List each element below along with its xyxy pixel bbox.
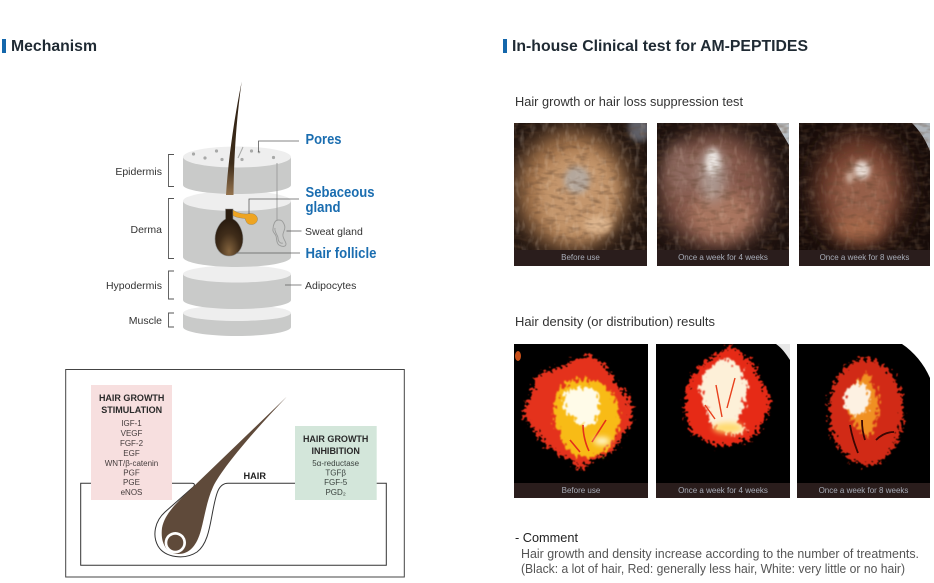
callout labels: Sebaceous	[306, 185, 374, 201]
layer labels: Epidermis	[115, 166, 162, 178]
comment block: - Comment	[515, 531, 579, 545]
box: inhibition: PGD₂	[325, 488, 346, 497]
caption: Before use	[562, 486, 601, 495]
callout labels: Hair follicle	[306, 246, 376, 262]
callout labels: Pores	[306, 132, 342, 148]
hair and follicle	[162, 397, 287, 554]
skin layer: hypodermis	[183, 266, 291, 309]
box: inhibition: FGF-5	[324, 478, 348, 487]
box: stimulation: STIMULATION	[101, 405, 162, 415]
heading: In-house Clinical test: In-house Clinical test for AM-PEPTIDES	[512, 38, 808, 55]
box: stimulation: PGF	[123, 468, 140, 478]
box: inhibition: 5α-reductase	[312, 459, 360, 468]
density map: before use	[514, 344, 648, 498]
photo: before use	[514, 114, 652, 266]
box: inhibition: HAIR GROWTH	[303, 434, 368, 444]
photo: 4 weeks	[657, 123, 789, 266]
box: stimulation: HAIR GROWTH	[99, 393, 164, 403]
layer labels	[106, 166, 162, 327]
panel: skin layers diagram	[106, 82, 376, 336]
callout labels	[306, 132, 376, 262]
skin layer: muscle	[183, 305, 291, 336]
layer labels: Derma	[130, 224, 162, 236]
box: stimulation: VEGF	[121, 429, 143, 438]
hair follicle bulb	[215, 209, 243, 256]
label: HAIR: HAIR	[244, 471, 266, 482]
box: inhibition	[295, 426, 377, 500]
box: stimulation: WNT/β-catenin	[105, 459, 158, 468]
hair bulb ring	[165, 532, 186, 553]
heading: Mechanism: Mechanism	[11, 38, 97, 55]
box: stimulation: eNOS	[121, 488, 142, 497]
comment block: (Black: a lot of hair, Red: generally less hair, White: very little or no hair)	[521, 562, 905, 576]
brackets	[168, 154, 174, 327]
skin outline	[81, 483, 386, 565]
caption: Once a week for 4 weeks	[678, 486, 768, 495]
photo: 8 weeks	[799, 123, 930, 266]
subheading: growth test: Hair growth or hair loss suppression test	[515, 95, 744, 109]
box: stimulation: FGF-2	[120, 439, 144, 448]
structure labels: Sweat gland	[305, 226, 363, 238]
box: stimulation: PGE	[123, 478, 140, 487]
box: inhibition: INHIBITION	[311, 446, 360, 456]
panel: hair growth factors	[66, 370, 404, 577]
structure labels	[305, 226, 363, 292]
box: inhibition: TGFβ	[325, 468, 346, 478]
box: stimulation: IGF-1	[121, 419, 142, 428]
skin layer: epidermis	[183, 146, 291, 194]
callout labels: gland	[306, 200, 340, 216]
comment block	[515, 531, 919, 576]
caption: Once a week for 4 weeks	[678, 253, 768, 262]
hair shaft	[226, 82, 242, 195]
density map: 4 weeks	[656, 344, 790, 498]
caption: Before use	[561, 253, 600, 262]
comment block: Hair growth and density increase according to the number of treatments.	[521, 547, 919, 561]
layer labels: Hypodermis	[106, 280, 162, 292]
caption: Once a week for 8 weeks	[819, 486, 908, 495]
sweat gland	[273, 163, 286, 246]
box: stimulation	[91, 385, 172, 500]
caption: Once a week for 8 weeks	[820, 253, 909, 262]
density map: 8 weeks	[797, 344, 930, 498]
layer labels: Muscle	[129, 315, 162, 327]
skin layer: derma	[183, 191, 291, 267]
structure labels: Adipocytes	[305, 280, 356, 292]
box: stimulation: EGF	[123, 449, 140, 458]
pointer lines	[236, 141, 302, 285]
subheading: density: Hair density (or distribution) results	[515, 315, 715, 329]
sebaceous gland	[233, 210, 258, 225]
